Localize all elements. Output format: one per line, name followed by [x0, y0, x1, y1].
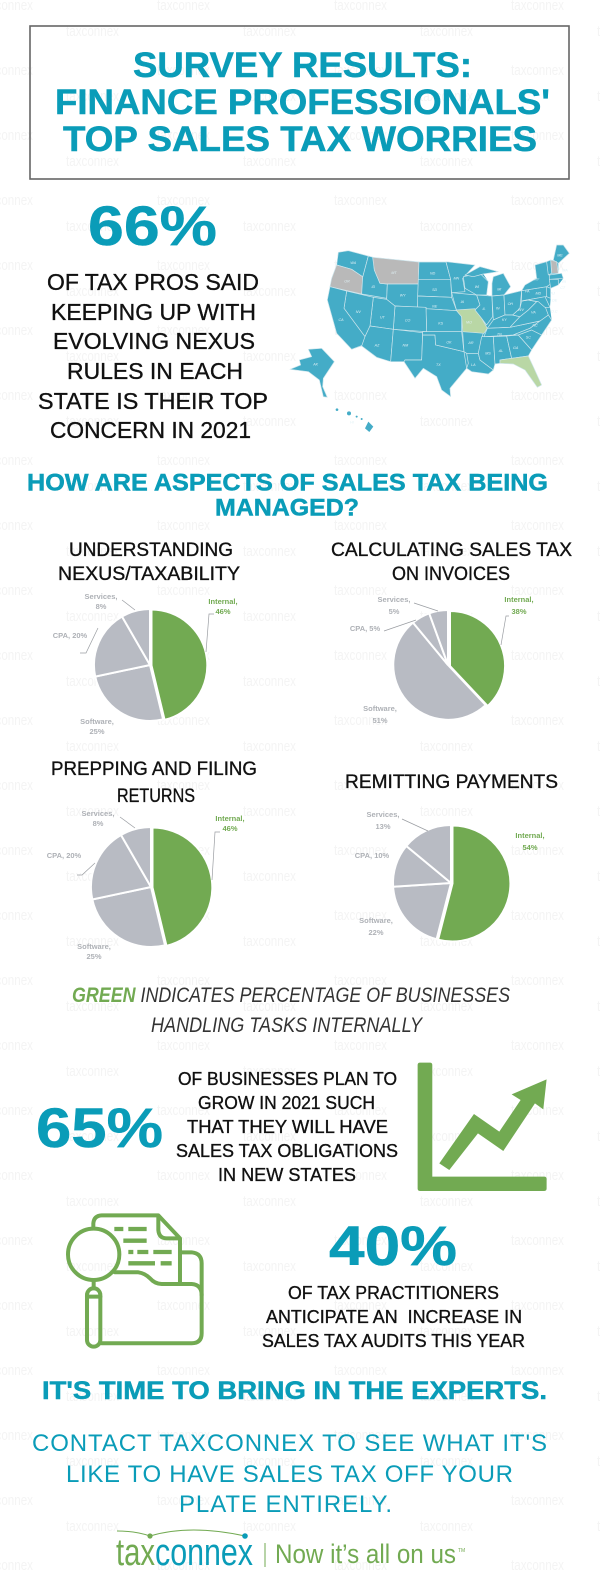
heading: understanding nexus: UNDERSTANDING: [69, 540, 233, 561]
pie chart: invoices: CPA, 5%: [350, 624, 380, 633]
US map: NJ: [550, 292, 555, 296]
pie chart: invoices: [350, 595, 534, 725]
US map: NV: [356, 310, 361, 314]
call to action text: PLATE ENTIRELY.: [179, 1491, 392, 1518]
title: TOP SALES TAX WORRIES: [63, 120, 537, 159]
text block: growth: SALES TAX OBLIGATIONS: [176, 1140, 398, 1161]
call to action text: CONTACT TAXCONNEX TO SEE WHAT IT'S: [32, 1430, 547, 1457]
text block: nexus concern: OF TAX PROS SAID: [47, 269, 259, 295]
title: [55, 46, 550, 159]
text block: growth: THAT THEY WILL HAVE: [187, 1116, 388, 1137]
US map: SC: [526, 335, 531, 339]
US map: AK: [312, 363, 319, 367]
text block: nexus concern: [38, 269, 268, 443]
text block: growth: GROW IN 2021 SUCH: [198, 1092, 375, 1113]
pie chart: returns: 8%: [93, 819, 104, 828]
US map: OR: [344, 280, 350, 284]
logo: taxconnex: Now it’s all on us: [275, 1539, 456, 1569]
text block: growth: OF BUSINESSES PLAN TO: [178, 1068, 397, 1089]
pie chart: nexus: 8%: [96, 602, 107, 611]
US map: CA: [338, 318, 344, 322]
US map: VA: [531, 310, 536, 314]
section heading: HOW ARE ASPECTS OF SALES TAX BEING: [27, 470, 548, 496]
heading: prepping and filing: [51, 759, 257, 807]
heading: calculating sales tax: ON INVOICES: [392, 564, 510, 585]
pie chart: remitting: 22%: [368, 928, 384, 937]
text block: audits: ANTICIPATE AN INCREASE IN: [266, 1306, 522, 1327]
US map: NE: [432, 305, 438, 309]
pie chart: returns: 46%: [222, 824, 238, 833]
logo: taxconnex: TM: [458, 1548, 465, 1554]
US map: KY: [502, 318, 507, 322]
call to action text: [32, 1430, 547, 1518]
text block: growth: IN NEW STATES: [218, 1164, 356, 1185]
text block: audits: [262, 1282, 525, 1351]
pie chart: invoices: Internal,: [504, 595, 534, 604]
pie chart: remitting: [355, 810, 545, 941]
logo: taxconnex: connex: [155, 1532, 253, 1574]
text block: nexus concern: RULES IN EACH: [67, 358, 243, 384]
US map: HI: [350, 420, 354, 424]
US map: MN: [453, 277, 460, 281]
pie chart: returns: CPA, 20%: [47, 851, 82, 860]
US map: MA: [562, 269, 568, 273]
pie chart: nexus: [53, 592, 238, 736]
pie chart: returns: 25%: [86, 952, 102, 961]
heading: calculating sales tax: CALCULATING SALES TAX: [331, 540, 572, 561]
call to action text: LIKE TO HAVE SALES TAX OFF YOUR: [66, 1461, 513, 1488]
pie chart: nexus: Services,: [85, 592, 117, 601]
icon: growth chart: [418, 1063, 547, 1191]
pie chart: remitting: 54%: [522, 843, 538, 852]
US map: ID: [371, 285, 376, 289]
text block: nexus concern: KEEPING UP WITH: [51, 299, 256, 325]
heading: prepping and filing: RETURNS: [117, 786, 195, 807]
pie chart: remitting: Software,: [359, 916, 393, 925]
US map: ME: [557, 254, 563, 258]
US map: CO: [405, 318, 411, 322]
logo: taxconnex: [116, 1530, 465, 1574]
US map: MI: [497, 287, 501, 291]
stat: 66%: 66%: [88, 194, 217, 257]
heading: prepping and filing: PREPPING AND FILING: [51, 759, 257, 780]
heading: understanding nexus: NEXUS/TAXABILITY: [58, 564, 240, 585]
US map: OH: [508, 302, 513, 306]
legend note: [72, 984, 510, 1037]
title: FINANCE PROFESSIONALS': [55, 83, 550, 122]
pie chart: invoices: Services,: [378, 595, 410, 604]
pie chart: nexus: 46%: [215, 607, 231, 616]
title box: [30, 26, 569, 179]
pie chart: returns: Services,: [82, 809, 114, 818]
pie chart: remitting: CPA, 10%: [355, 851, 390, 860]
pie chart: invoices: 38%: [511, 607, 527, 616]
section heading: [27, 470, 548, 522]
US map: ND: [430, 271, 436, 275]
US map: SD: [432, 288, 438, 292]
US map: IN: [496, 306, 500, 310]
pie chart: nexus: 25%: [89, 727, 105, 736]
call to action heading: IT'S TIME TO BRING IN THE EXPERTS.: [42, 1377, 547, 1405]
US map: NM: [402, 343, 409, 347]
US map: IL: [482, 307, 486, 311]
US map: AZ: [374, 344, 380, 348]
US map: AR: [467, 341, 474, 345]
heading: calculating sales tax: [331, 540, 572, 585]
pie chart: returns: Internal,: [215, 814, 245, 823]
stat: 65%: 65%: [36, 1096, 163, 1159]
US map: MT: [391, 271, 397, 275]
US map: MO: [466, 320, 472, 324]
US map: PA: [525, 290, 530, 294]
US map: GA: [513, 346, 519, 350]
US map: LA: [471, 363, 476, 367]
pie chart: remitting: 13%: [375, 822, 391, 831]
pie chart: invoices: Software,: [363, 704, 397, 713]
text block: audits: OF TAX PRACTITIONERS: [288, 1282, 499, 1303]
logo: taxconnex: tax: [116, 1532, 155, 1574]
US map: CT: [560, 286, 566, 290]
US map: WY: [400, 293, 406, 297]
US map: [290, 245, 569, 432]
US map: WI: [475, 285, 479, 289]
pie chart: nexus: Software,: [80, 717, 114, 726]
icon: folder and magnifier: [68, 1215, 202, 1347]
text block: nexus concern: STATE IS THEIR TOP: [38, 388, 268, 414]
pie chart: nexus: CPA, 20%: [53, 631, 88, 640]
section heading: MANAGED?: [215, 494, 359, 522]
heading: understanding nexus: [58, 540, 240, 585]
stat: 40%: 40%: [329, 1214, 457, 1277]
US map: KS: [438, 321, 444, 325]
title: SURVEY RESULTS:: [133, 46, 472, 85]
pie chart: invoices: 51%: [372, 716, 388, 725]
text block: nexus concern: EVOLVING NEXUS: [53, 328, 255, 354]
pie chart: remitting: Internal,: [515, 831, 545, 840]
pie chart: nexus: Internal,: [208, 597, 238, 606]
heading: remitting payments: REMITTING PAYMENTS: [345, 772, 558, 793]
legend note: GREEN INDICATES PERCENTAGE OF BUSINESSES: [72, 984, 510, 1007]
US map: NY: [534, 278, 540, 282]
US map: AL: [498, 349, 503, 353]
US map: NC: [532, 324, 538, 328]
US map: MD: [535, 292, 542, 296]
pie chart: returns: Software,: [77, 942, 111, 951]
US map: TX: [436, 363, 441, 367]
US map: D.C: [551, 309, 558, 313]
text block: growth: [176, 1068, 398, 1185]
pie chart: invoices: 5%: [389, 607, 400, 616]
text block: nexus concern: CONCERN IN 2021: [50, 417, 251, 443]
US map: WV: [518, 308, 524, 312]
text block: audits: SALES TAX AUDITS THIS YEAR: [262, 1330, 525, 1351]
US map: RI: [562, 280, 566, 284]
pie chart: remitting: Services,: [367, 810, 399, 819]
US map: UT: [380, 316, 386, 320]
US map: DE: [552, 298, 558, 302]
US map: OK: [446, 341, 452, 345]
US map: MS: [485, 351, 491, 355]
US map: TN: [497, 332, 502, 336]
legend note: HANDLING TASKS INTERNALLY: [151, 1014, 424, 1037]
US map: WA: [350, 261, 357, 265]
pie chart: returns: [47, 809, 245, 961]
US map: IA: [461, 300, 465, 304]
